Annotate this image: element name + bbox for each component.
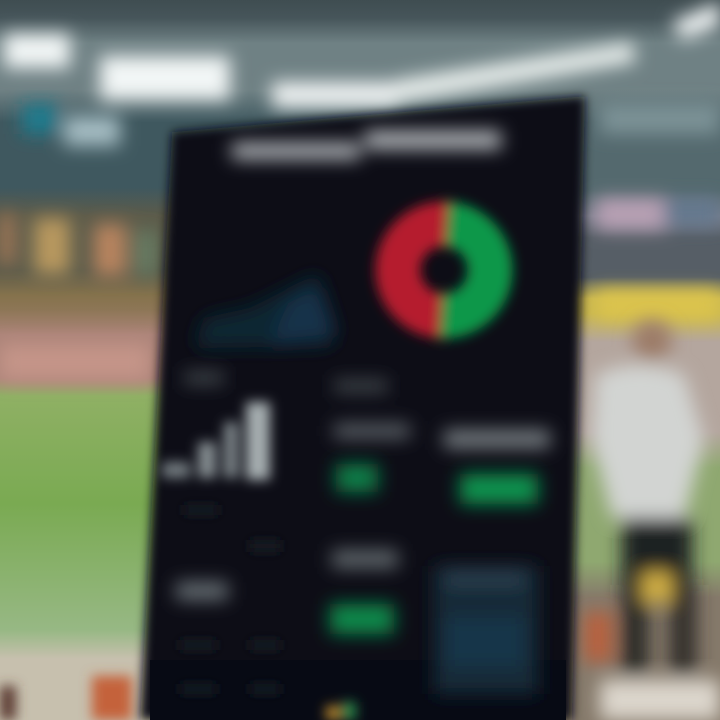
donut chart [398,224,490,316]
stat block labels [176,372,550,600]
colourful logo bottom [326,702,356,720]
player figure [584,320,720,720]
right side stands and banners [596,198,720,320]
stadium roof lights [4,2,720,146]
foreground spectators bottom left [0,676,132,720]
blue data card [434,566,538,694]
panel: statistics board [140,96,585,720]
green stat values [330,464,538,634]
crowd banners left [0,214,158,380]
faint stat labels [180,505,280,694]
area chart [196,274,336,348]
bar chart [162,402,270,480]
heading [232,131,501,159]
